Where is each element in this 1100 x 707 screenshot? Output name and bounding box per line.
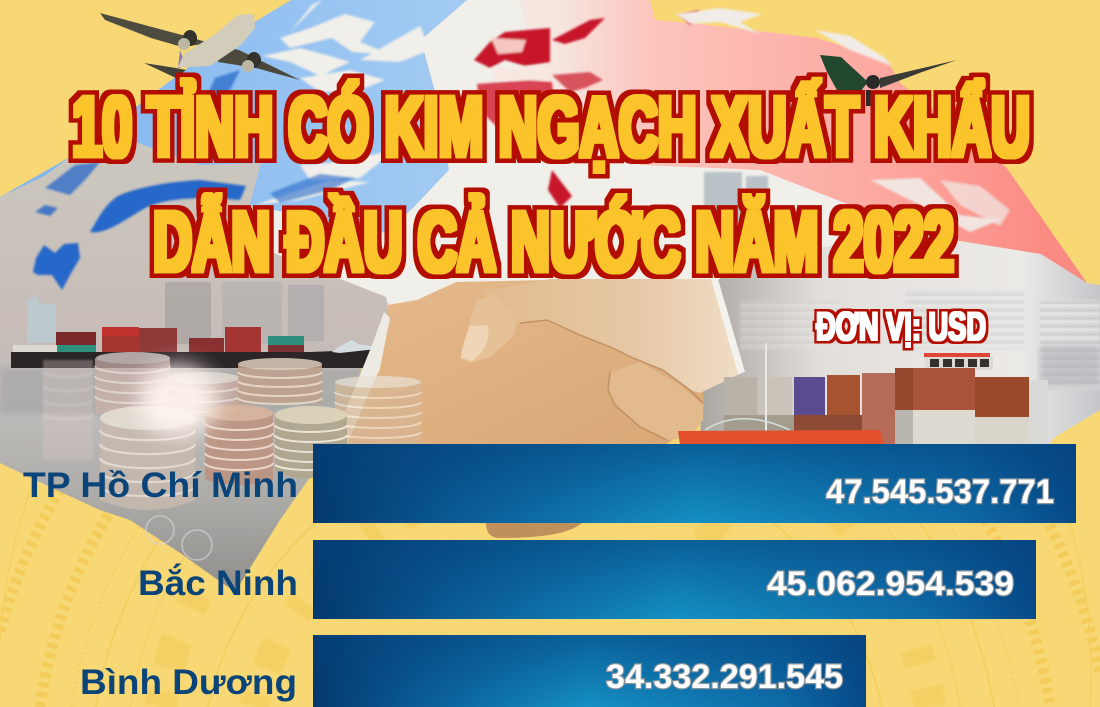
coin stack far left bbox=[43, 360, 93, 460]
coin stacks right bbox=[905, 290, 1025, 350]
lens glow bbox=[138, 364, 218, 436]
skyline and coin backdrop bbox=[700, 240, 1100, 445]
map: white continents on blue bbox=[255, 0, 430, 205]
suit and harbour backdrop bbox=[0, 140, 389, 592]
coin stacks left bbox=[43, 352, 421, 510]
coin stack front gold bbox=[275, 406, 347, 478]
far wing bbox=[100, 13, 210, 47]
lower hand bbox=[345, 280, 704, 445]
hull bbox=[678, 430, 884, 445]
distant buildings bbox=[165, 282, 324, 344]
plane right bbox=[820, 55, 957, 106]
sunken coins bbox=[146, 516, 212, 560]
grey photo panel bbox=[0, 140, 389, 592]
finger knuckle bbox=[608, 362, 703, 440]
row: TP Hồ Chí Minh: TP Hồ Chí Minh bbox=[23, 466, 298, 505]
plane left bbox=[100, 13, 300, 80]
ship bow deck bbox=[332, 340, 386, 353]
fuselage bbox=[178, 14, 255, 67]
unit label: ĐƠN VỊ: USD bbox=[816, 305, 986, 349]
engines bbox=[183, 30, 261, 68]
wing bbox=[880, 60, 957, 88]
deep blue peninsula bbox=[33, 243, 80, 290]
fuselage bbox=[820, 55, 868, 92]
row: Bắc Ninh: 45.062.954.539 bbox=[767, 565, 1014, 603]
blue land on grey bbox=[33, 70, 355, 290]
bar chart bbox=[23, 444, 1076, 707]
ship containers bbox=[56, 327, 304, 353]
coin stack over hand bbox=[335, 376, 421, 444]
engine bbox=[866, 75, 880, 89]
containers bbox=[724, 368, 1048, 445]
tail fin bbox=[178, 50, 186, 68]
row: Bình Dương bbox=[80, 635, 866, 707]
title bbox=[72, 79, 1030, 290]
coin stack middle rear bbox=[167, 372, 240, 418]
handshake bbox=[345, 279, 745, 538]
bridge bbox=[924, 353, 993, 370]
shirt lapel bbox=[333, 312, 390, 442]
map: pale land on pink bbox=[676, 8, 1010, 232]
lower thumb tip bbox=[486, 523, 582, 538]
row: Bình Dương: Bình Dương bbox=[80, 663, 297, 702]
row: TP Hồ Chí Minh: 47.545.537.771 bbox=[826, 473, 1054, 511]
map: pink continent bbox=[520, 0, 1087, 283]
thumb nail bbox=[461, 325, 488, 361]
map: white centre bbox=[250, 0, 960, 312]
coin stack pink rear bbox=[95, 352, 170, 413]
right photo panel bbox=[700, 240, 1100, 445]
world map bbox=[0, 0, 1087, 312]
thumb bbox=[460, 295, 518, 363]
ship superstructure bbox=[27, 295, 56, 343]
blue islands bbox=[45, 162, 100, 195]
row: Bình Dương: 34.332.291.545 bbox=[606, 658, 843, 696]
tail plane bbox=[144, 63, 186, 78]
ship hull bbox=[11, 347, 386, 368]
row: Bắc Ninh: Bắc Ninh bbox=[138, 563, 298, 603]
map: blue ocean bbox=[0, 0, 467, 233]
deep blue coast bbox=[90, 180, 246, 232]
cuff bbox=[711, 279, 745, 374]
cargo ship right bbox=[678, 343, 1048, 445]
cargo ship left bbox=[11, 295, 386, 368]
map: grey-blue buildings bbox=[704, 172, 768, 222]
mast bbox=[765, 343, 767, 433]
map: red land bbox=[474, 10, 700, 208]
row: Bắc Ninh bbox=[138, 540, 1036, 619]
near wing bbox=[218, 46, 300, 80]
coin stack front copper bbox=[205, 405, 273, 485]
upper hand bbox=[480, 279, 742, 393]
row: TP Hồ Chí Minh bbox=[23, 444, 1076, 523]
coin stack front pale bbox=[100, 406, 196, 510]
landing gear bbox=[866, 90, 871, 106]
coin stack copper rear bbox=[238, 358, 322, 404]
rail bbox=[705, 419, 790, 430]
water bbox=[0, 368, 370, 414]
